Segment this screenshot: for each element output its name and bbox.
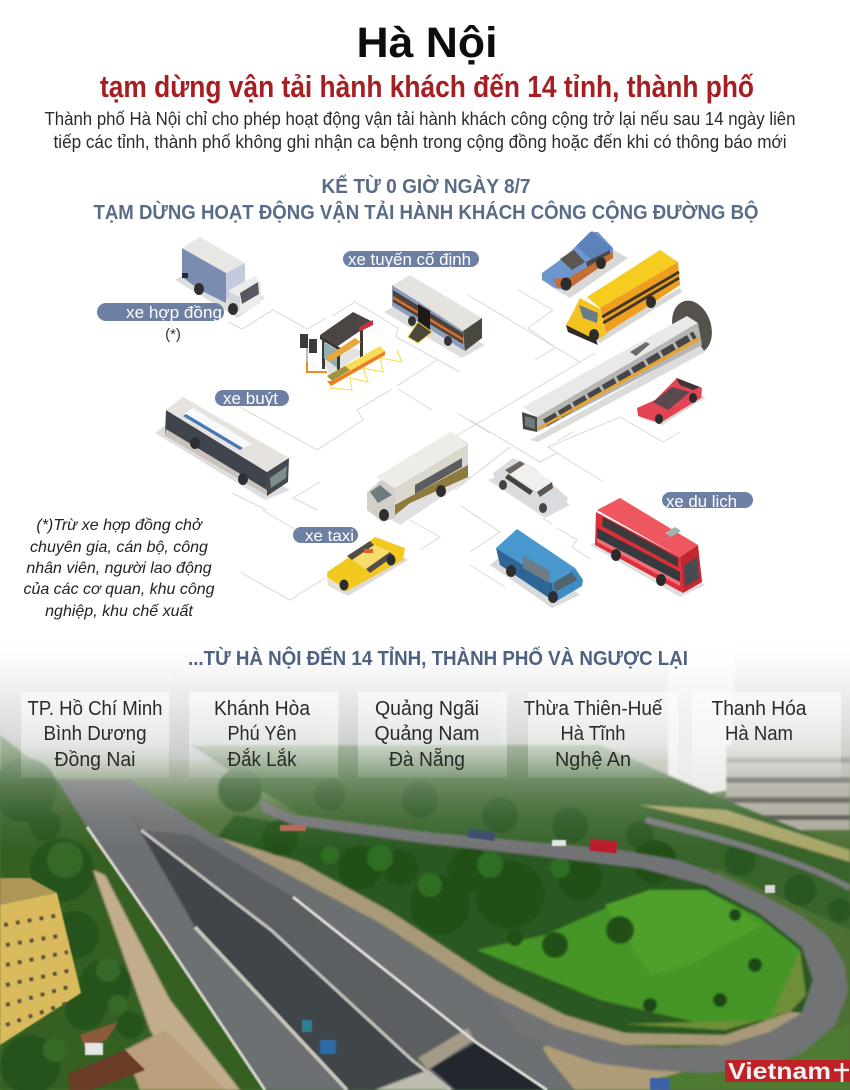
road network lines <box>228 290 680 600</box>
label: xe hop dong <box>97 303 224 322</box>
label: xe taxi: xe taxi <box>305 528 354 545</box>
photo: left tree belt <box>0 735 265 1090</box>
footnote <box>23 517 215 620</box>
panel: destination group 5: Hà Nam <box>725 723 793 745</box>
photo: rust pipes <box>68 1022 145 1090</box>
footnote: (*)Trừ xe hợp đồng chở <box>36 517 203 534</box>
label: xe buyt: xe buýt <box>223 390 278 408</box>
panel: destination group 3 <box>358 692 507 778</box>
panel: destination group 1: TP. Hồ Chí Minh <box>28 698 162 720</box>
label: xe du lich: xe du lich <box>666 493 737 511</box>
panel: destination group 2: Khánh Hòa <box>214 698 311 720</box>
photo: island grass <box>477 890 805 1022</box>
intro text: Thành phố Hà Nội chỉ cho phép hoạt động vận tải hành khách công cộng trở lại nếu sau 14 ngày liên <box>44 109 796 129</box>
vehicle: yellow school bus <box>566 250 682 345</box>
vehicle: camper van <box>367 432 475 525</box>
panel: destination group 4 <box>524 692 678 778</box>
vehicle: blue van <box>490 529 583 608</box>
photo: central vegetation island <box>217 815 813 1045</box>
panel: destination group 2: Đắk Lắk <box>228 748 297 771</box>
photo: upper tree belt <box>190 745 850 930</box>
section heading: suspension: TẠM DỪNG HOẠT ĐỘNG VẬN TẢI HÀNH KHÁCH CÔNG CỘNG ĐƯỜNG BỘ <box>94 200 758 224</box>
panel: destination group 3: Đà Nẵng <box>389 748 465 771</box>
photo: dirt service track <box>93 870 240 1090</box>
photo: main carriageway <box>57 780 575 1090</box>
panel: destination group 3: Quảng Ngãi <box>375 698 479 720</box>
section heading: suspension <box>94 174 758 224</box>
panel: destination group 4: Thừa Thiên-Huế <box>524 698 662 720</box>
footnote: nghiệp, khu chế xuất <box>45 603 193 620</box>
vehicle: city bus <box>155 397 290 500</box>
subtitle: tạm dừng vận tải hành khách đến 14 tỉnh, thành phố <box>100 69 754 104</box>
vehicle: blue SUV <box>542 231 628 298</box>
panel: destination group 5 <box>692 692 841 778</box>
vehicle: red double-decker <box>590 498 705 597</box>
photo: distant buildings <box>170 640 850 830</box>
footnote: của các cơ quan, khu công <box>23 581 215 598</box>
panel: destination group 2 <box>189 692 338 778</box>
section heading: destinations: ...TỪ HÀ NỘI ĐẾN 14 TỈNH, THÀNH PHỐ VÀ NGƯỢC LẠI <box>188 646 688 670</box>
fog overlay fading photo into white <box>0 638 850 850</box>
photo: vehicles and details <box>280 825 775 1090</box>
note marker: (*) <box>165 326 181 343</box>
intro text <box>44 109 796 152</box>
vehicle: box truck <box>175 237 265 318</box>
vehicle: tram entering tunnel <box>522 295 718 442</box>
photo: tan field top right <box>640 805 850 862</box>
panel: destination group 2: Phú Yên <box>228 723 296 745</box>
label: xe taxi <box>293 527 358 545</box>
vehicle: fixed-route coach <box>384 275 485 358</box>
photo: island ramp verge <box>217 837 802 1045</box>
intro text: tiếp các tỉnh, thành phố không ghi nhận ca bệnh trong cộng đồng hoặc đến khi có thông báo mới <box>54 132 786 152</box>
panel: destination group 3: Quảng Nam <box>374 723 480 745</box>
footnote: chuyên gia, cán bộ, công <box>30 539 208 556</box>
vehicle: silver car <box>488 458 570 518</box>
vehicle: yellow taxi <box>327 537 408 596</box>
photo: loop ramp <box>260 800 848 1073</box>
panel: destination group 4: Nghệ An <box>555 749 631 771</box>
panel: destination group 4: Hà Tĩnh <box>560 723 626 745</box>
panel: destination group 1: Đồng Nai <box>54 749 136 771</box>
logo: Vietnam+: Vietnam <box>728 1058 831 1084</box>
photo: carriageway barriers <box>293 897 547 1090</box>
title: Hà Nội <box>356 19 498 67</box>
photo: bottom right dirt and grass <box>540 1040 850 1090</box>
label: xe hop dong: xe hợp đồng <box>126 304 222 322</box>
section heading: suspension: KỂ TỪ 0 GIỜ NGÀY 8/7 <box>322 174 530 198</box>
footnote: nhân viên, người lao động <box>26 560 212 577</box>
label: xe tuyen co dinh: xe tuyến cố định <box>348 251 471 269</box>
background: aerial photo of highway interchange <box>0 640 850 1090</box>
vehicle: red car <box>637 378 705 425</box>
panel: destination group 5: Thanh Hóa <box>712 698 807 720</box>
panel: destination group 1 <box>21 692 169 778</box>
icon: bus stop <box>300 312 402 390</box>
panel: destination group 1: Bình Dương <box>44 723 146 745</box>
photo: yellow apartment block <box>0 878 81 1045</box>
